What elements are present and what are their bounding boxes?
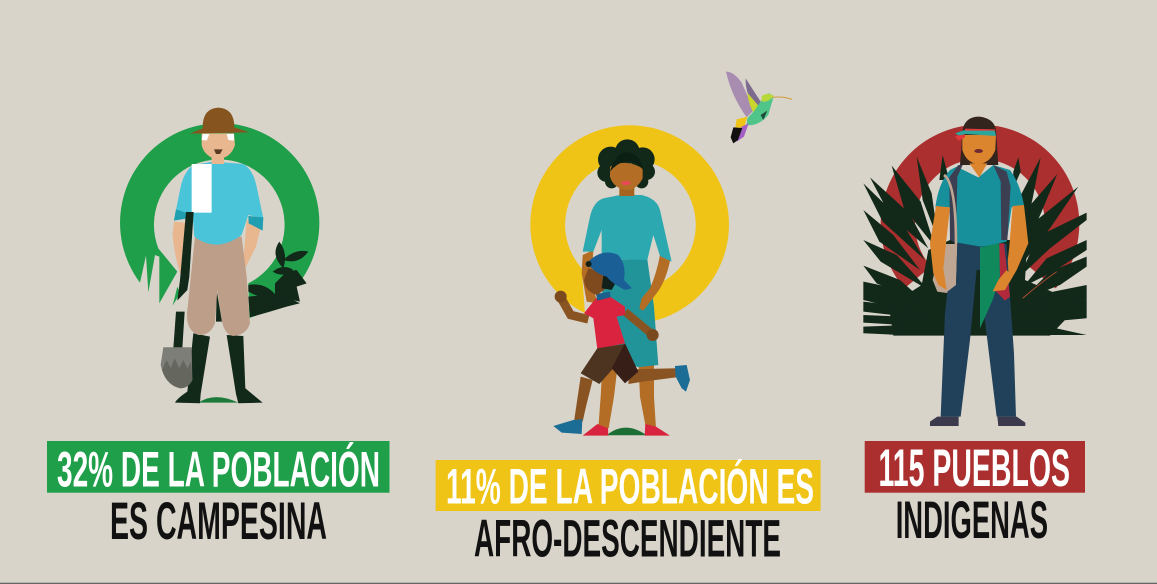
head xyxy=(962,135,996,164)
hat xyxy=(190,108,249,134)
green label box xyxy=(47,441,390,493)
bag strap xyxy=(944,175,956,244)
boots xyxy=(175,333,263,403)
ground xyxy=(198,397,238,403)
caption: 11% afro-descendiente xyxy=(436,458,821,568)
woman legs xyxy=(598,360,656,428)
woman top xyxy=(583,195,672,262)
red sash xyxy=(995,243,1010,301)
boy shorts xyxy=(581,344,625,384)
bird beak xyxy=(773,97,792,99)
caption: 115 pueblos indigenas xyxy=(865,439,1085,550)
green ring xyxy=(120,123,319,318)
panel: afro-descendant illustration xyxy=(530,72,792,436)
boy back leg xyxy=(628,368,677,384)
yellow label box xyxy=(436,460,821,511)
boy back shoe xyxy=(675,365,690,392)
woman skirt xyxy=(602,259,658,367)
caption: 32% campesina xyxy=(47,441,390,551)
bird body xyxy=(747,93,773,125)
head xyxy=(202,133,235,164)
ground xyxy=(607,428,647,435)
arms xyxy=(173,220,262,279)
woman face xyxy=(610,163,643,190)
yellow ring xyxy=(530,125,729,321)
trousers xyxy=(187,237,250,336)
bird wings xyxy=(726,72,754,117)
sub-label: AFRO-DESCENDIENTE xyxy=(474,510,781,568)
panel: campesino illustration xyxy=(120,108,319,403)
woman arms xyxy=(582,250,671,311)
boy head xyxy=(584,268,610,295)
red label box xyxy=(865,441,1085,493)
boy front shoe xyxy=(553,419,582,434)
panel: indigenous illustration xyxy=(863,117,1087,426)
neck xyxy=(969,163,987,177)
woman hair xyxy=(597,139,655,188)
agave plant xyxy=(863,155,1087,336)
boy arms xyxy=(555,291,659,341)
boy cap xyxy=(587,253,632,290)
shovel xyxy=(173,212,194,348)
yellow label text: 11% DE LA POBLACIÓN ES xyxy=(446,458,814,514)
white towel xyxy=(192,164,212,213)
woman neck xyxy=(619,187,634,196)
mouth xyxy=(974,149,983,153)
shoulder bag xyxy=(933,244,957,293)
shirt xyxy=(174,162,263,245)
sub-label: ES CAMPESINA xyxy=(110,492,327,551)
plant xyxy=(216,242,308,322)
shoes xyxy=(930,417,1025,426)
bird tail xyxy=(735,117,747,128)
red ring xyxy=(881,125,1079,288)
hummingbird xyxy=(726,72,792,143)
green sash xyxy=(980,243,1000,328)
hand xyxy=(993,270,1013,291)
woman shoes xyxy=(583,424,670,436)
boy front leg xyxy=(574,377,593,422)
boy shirt xyxy=(584,297,625,349)
arms xyxy=(930,205,1028,291)
green label text: 32% DE LA POBLACIÓN xyxy=(57,442,380,498)
shirt xyxy=(935,165,1024,247)
trousers xyxy=(941,243,1016,417)
headband xyxy=(955,130,996,136)
hair xyxy=(960,117,998,165)
backpack straps xyxy=(949,165,1011,243)
